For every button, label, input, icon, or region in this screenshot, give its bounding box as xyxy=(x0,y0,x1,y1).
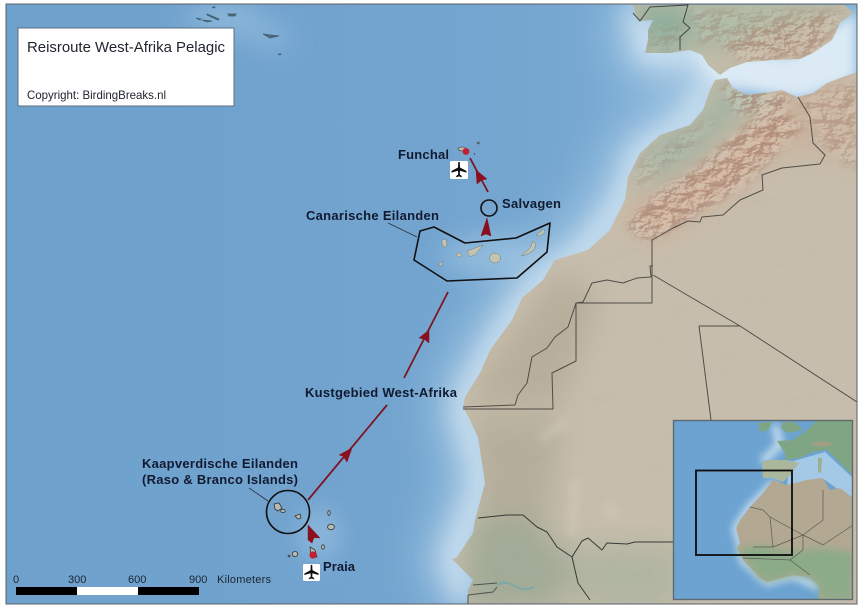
inset tropical Africa xyxy=(737,545,853,600)
route arrow: Canaries to Salvagen xyxy=(481,218,491,236)
title box: Reisroute West-Afrika Pelagic xyxy=(27,39,225,56)
land base colour xyxy=(440,0,863,610)
inset overview map xyxy=(673,420,853,600)
label: Salvagen: Salvagen xyxy=(502,196,561,211)
country borders xyxy=(463,5,857,604)
terrain relief texture xyxy=(440,0,863,610)
Senegal and Mauritania south xyxy=(470,420,560,520)
inset frame xyxy=(674,420,852,600)
scale bar: 0 xyxy=(13,574,19,586)
Azores islands xyxy=(196,7,281,55)
label: Canarische Eilanden: Canarische Eilanden xyxy=(306,208,439,223)
inset borders xyxy=(743,490,853,575)
scale bar: Kilometers xyxy=(217,574,272,586)
scale bar: 900 xyxy=(189,574,207,586)
land masses xyxy=(440,0,863,610)
Gambia river xyxy=(497,583,533,589)
label: Funchal: Funchal xyxy=(398,147,449,162)
north Morocco green xyxy=(628,80,770,190)
Cape Verde islands xyxy=(274,503,334,557)
island halos xyxy=(185,6,540,561)
Funchal marker xyxy=(463,148,469,155)
inset Alps xyxy=(812,442,832,446)
inset Africa xyxy=(736,478,853,600)
scale bar: 300 xyxy=(68,574,86,586)
leader: Cape Verde label xyxy=(249,488,268,501)
pale desert ridges xyxy=(542,426,558,438)
label: Kaapverdische Eilanden: Kaapverdische Eilanden xyxy=(142,456,298,471)
label: Praia: Praia xyxy=(323,559,356,574)
label: Raso and Branco Islands: (Raso & Branco Islands) xyxy=(142,472,298,487)
Praia marker xyxy=(309,551,317,559)
inset Europe xyxy=(777,420,853,474)
scale bar xyxy=(13,574,272,595)
route arrow: Praia to Cape Verde xyxy=(308,525,320,543)
Madeira islands xyxy=(458,142,479,155)
route arrow: West Africa coast xyxy=(308,292,448,500)
coastal light glow xyxy=(452,5,720,604)
label: Kustgebied West-Afrika: Kustgebied West-Afrika xyxy=(305,385,458,400)
airport icon: Funchal xyxy=(450,161,468,179)
title box: Copyright: BirdingBreaks.nl xyxy=(27,88,166,102)
title box xyxy=(18,28,234,106)
inset Iberia xyxy=(762,460,799,482)
leader: Canary label xyxy=(388,223,417,237)
west Iberia green xyxy=(630,0,690,60)
airport icon: Praia xyxy=(303,564,320,581)
mountain relief texture xyxy=(626,9,856,242)
Canary islands outline xyxy=(414,223,550,281)
inset mediterranean xyxy=(787,452,853,500)
inset coastal glow xyxy=(736,425,820,587)
Salvagen circle xyxy=(481,200,497,216)
Cape Verde circle xyxy=(266,490,310,534)
Canary islands xyxy=(438,229,545,266)
route arrow: Salvagen to Funchal xyxy=(470,158,488,192)
inset extent box xyxy=(696,470,792,555)
scale bar: 600 xyxy=(128,574,146,586)
inset Ireland xyxy=(758,422,772,432)
inset Britain xyxy=(781,422,803,433)
mediterranean light water xyxy=(690,10,857,100)
inset Sardinia and Corsica xyxy=(818,458,822,473)
west Sahara grey xyxy=(470,270,600,405)
